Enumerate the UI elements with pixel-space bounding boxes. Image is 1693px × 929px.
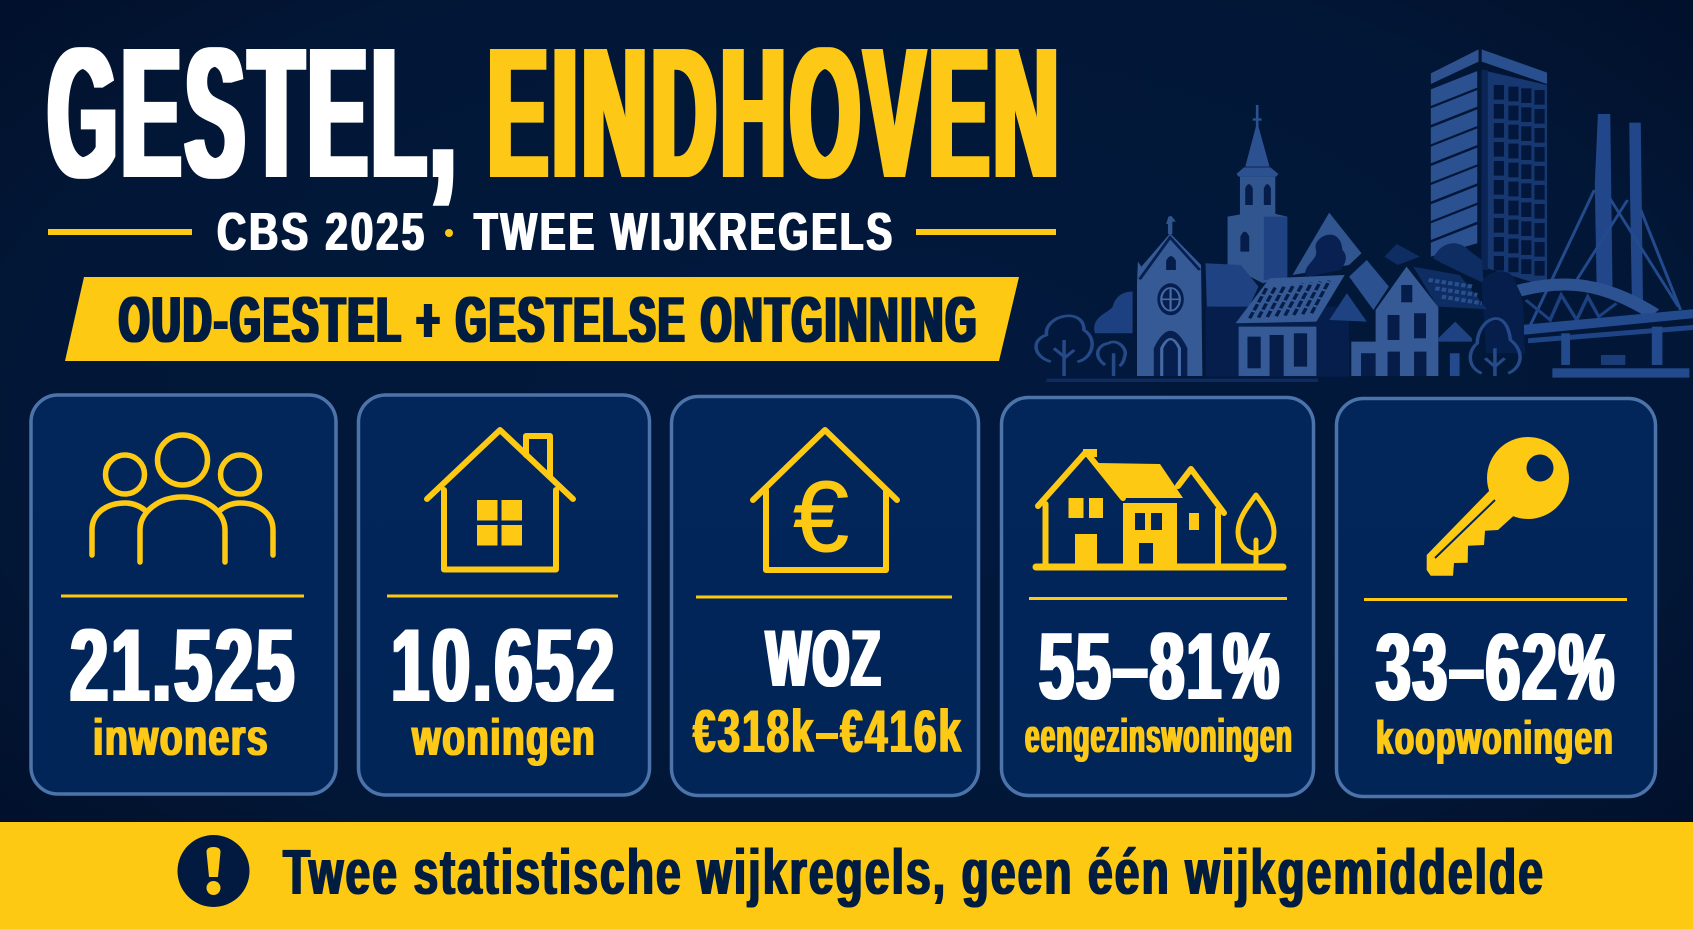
subtitle with rules [48, 202, 1056, 262]
panel: WOZ: € [793, 461, 849, 573]
banner: OUD-GESTEL + GESTELSE ONTGINNING [119, 283, 979, 356]
icon: exclamation [178, 835, 250, 907]
icon: house with euro [753, 430, 897, 570]
panel: woningen: woningen [411, 709, 596, 767]
bush behind church [1094, 292, 1133, 333]
icon: people [92, 435, 273, 562]
panel: inwoners [31, 395, 336, 794]
panel: woningen [358, 395, 650, 795]
panel: eengezinswoningen [1002, 398, 1314, 796]
title: GESTEL, [48, 10, 460, 217]
banner [65, 277, 1019, 361]
panel: eengezinswoningen: eengezinswoningen [1025, 709, 1293, 762]
panel: eengezinswoningen: 55–81% [1039, 613, 1281, 720]
panel: koopwoningen [1336, 398, 1656, 796]
gabled roofs behind houses [1205, 213, 1526, 377]
icon: family house and tree [1036, 449, 1283, 567]
bridge [1519, 114, 1693, 378]
town house [1351, 267, 1487, 376]
high-rise tower [1431, 49, 1547, 287]
panel: inwoners: inwoners [93, 709, 269, 767]
outline trees [1036, 316, 1520, 376]
panel: WOZ: WOZ [766, 614, 882, 704]
subtitle with rules: TWEE WIJKREGELS [474, 202, 895, 262]
ground line [1046, 379, 1318, 382]
bottom callout [0, 822, 1693, 929]
church steeple [1228, 105, 1287, 283]
skyline illustration [1036, 49, 1693, 382]
icon: house [427, 430, 573, 570]
church [1137, 216, 1202, 376]
subtitle with rules: CBS 2025 [217, 202, 427, 262]
icon: key [1427, 437, 1569, 576]
house with solar roof [1236, 275, 1345, 376]
panel: WOZ [672, 396, 978, 796]
panel: woningen: 10.652 [391, 608, 617, 724]
panel: inwoners: 21.525 [70, 608, 297, 724]
panel: WOZ: €318k–€416k [693, 698, 963, 765]
text: EINDHOVEN [488, 10, 1063, 217]
